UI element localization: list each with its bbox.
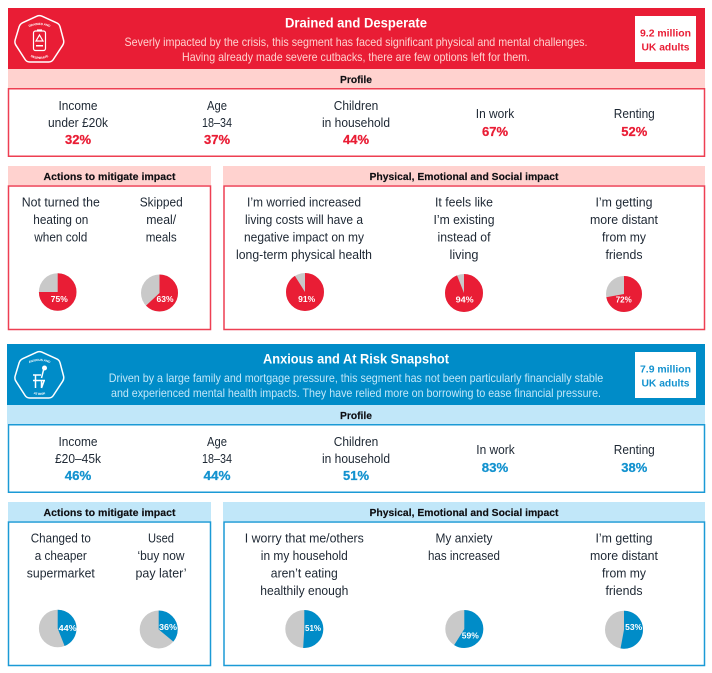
text block: segment description: Having already made severe cutbacks, there are few options left for them. <box>182 50 530 64</box>
item: existing instead of living <box>434 195 494 312</box>
stat: in work: 83% <box>482 460 509 475</box>
callout: 9.2 million UK adults: 9.2 million <box>640 28 691 40</box>
callout: 7.9 million UK adults <box>635 352 696 398</box>
stat: income: under £20k <box>48 115 108 130</box>
text block: segment description <box>109 371 604 400</box>
stat: children in household: in household <box>322 115 390 130</box>
icon: anxious and at risk badge with figure on chair: ANXIOUS AND <box>29 358 50 364</box>
stat: renting: 52% <box>621 124 648 139</box>
item: anxiety has increased: My anxiety <box>436 531 493 546</box>
stat: age: Age <box>207 434 227 449</box>
stat: in work: 67% <box>482 124 508 139</box>
stat: income: Income <box>58 98 98 113</box>
stat: age: 44% <box>204 468 231 483</box>
item: worry about eating healthily: 51% <box>305 624 321 633</box>
item: used buy now pay later: Used <box>148 531 174 546</box>
item: existing instead of living: I’m existing <box>434 212 494 227</box>
item: not turned the heating on: heating on <box>33 212 88 227</box>
item: more distant from friends <box>590 531 658 649</box>
item: existing instead of living: instead of <box>438 230 491 245</box>
text block: segment description: Severly impacted by the crisis, this segment has faced significant physical and mental challenges. <box>124 35 588 49</box>
text block: segment description <box>124 35 588 64</box>
item: more distant from friends: I’m getting <box>596 195 652 210</box>
item: changed to a cheaper supermarket: a cheaper <box>35 548 87 563</box>
stat: income: 46% <box>65 468 92 483</box>
icon: anxious and at risk badge with figure on chair: AT RISK <box>34 392 46 395</box>
icon: drained and desperate badge with battery <box>14 14 64 63</box>
item: used buy now pay later: 36% <box>159 623 177 632</box>
item: anxiety has increased: has increased <box>428 548 500 563</box>
heading: Profile: Profile <box>340 74 372 86</box>
item: changed to a cheaper supermarket: Changed to <box>31 531 91 546</box>
item: worried about long-term physical health: negative impact on my <box>244 230 364 245</box>
item: anxiety has increased <box>428 531 500 648</box>
heading: Profile: Profile <box>340 410 372 422</box>
stat: in work <box>476 106 515 139</box>
item: more distant from friends: more distant <box>590 548 658 563</box>
item: skipped meals: Skipped <box>140 195 183 210</box>
stat: renting: Renting <box>614 442 655 457</box>
stat: income <box>48 98 108 147</box>
icon: drained and desperate badge with battery: DESPERATE <box>30 54 48 59</box>
item: more distant from friends <box>590 195 658 312</box>
item: existing instead of living: It feels like <box>435 195 493 210</box>
item: worried about long-term physical health: 91% <box>298 295 315 304</box>
stat: children in household: 51% <box>343 468 369 483</box>
stat: children in household: Children <box>334 434 378 449</box>
panel: Anxious and At Risk segment <box>7 344 706 666</box>
text block: segment description: and experienced mental health impacts. They have relied more on borrowing to ease financial pressure. <box>111 386 601 400</box>
panel: Physical, Emotional and Social impact <box>223 502 705 666</box>
item: more distant from friends: 72% <box>616 296 632 305</box>
item: worried about long-term physical health: long-term physical health <box>236 247 372 262</box>
stat: age: 37% <box>204 132 230 147</box>
header banner: Anxious and At Risk Snapshot <box>7 344 705 405</box>
icon: drained and desperate badge with battery: DRAINED AND <box>28 22 50 27</box>
panel: Drained and Desperate segment <box>8 8 706 330</box>
callout: 9.2 million UK adults: UK adults <box>642 42 690 54</box>
stat: age <box>202 98 232 147</box>
item: more distant from friends: friends <box>606 583 643 598</box>
item: skipped meals <box>140 195 183 312</box>
item: worried about long-term physical health: living costs will have a <box>245 212 364 227</box>
stat: renting: Renting <box>614 106 655 121</box>
item: worry about eating healthily: aren’t eating <box>271 566 338 581</box>
stat: age: 18–34 <box>202 115 232 130</box>
callout: 9.2 million UK adults <box>635 16 696 62</box>
stat: renting <box>614 442 655 475</box>
stat: income: 32% <box>65 132 91 147</box>
item: skipped meals: 63% <box>156 295 174 304</box>
item: more distant from friends: friends <box>606 247 643 262</box>
stat: children in household: Children <box>334 98 378 113</box>
item: used buy now pay later: ‘buy now <box>138 548 185 563</box>
item: more distant from friends: from my <box>602 566 646 581</box>
panel: Profile <box>8 69 705 156</box>
heading: Physical, Emotional and Social impact: Physical, Emotional and Social impact <box>370 171 559 183</box>
heading: Actions to mitigate impact: Actions to mitigate impact <box>44 507 176 519</box>
stat: children in household <box>322 98 390 147</box>
header banner: Drained and Desperate <box>8 8 705 69</box>
item: changed to a cheaper supermarket <box>27 531 95 647</box>
stat: income <box>55 434 101 483</box>
item: used buy now pay later <box>136 531 187 648</box>
item: more distant from friends: from my <box>602 230 646 245</box>
panel: Actions to mitigate impact <box>8 502 211 666</box>
heading: Drained and Desperate: Drained and Desperate <box>285 14 427 30</box>
item: worry about eating healthily <box>245 531 364 648</box>
item: anxiety has increased: 59% <box>462 632 479 641</box>
item: more distant from friends: more distant <box>590 212 658 227</box>
stat: in work: In work <box>476 106 515 121</box>
callout: 7.9 million UK adults: UK adults <box>642 378 690 390</box>
item: not turned the heating on <box>22 195 100 311</box>
stat: children in household: 44% <box>343 132 369 147</box>
stat: children in household: in household <box>322 451 390 466</box>
item: worried about long-term physical health <box>236 195 372 311</box>
item: more distant from friends: 53% <box>625 623 642 632</box>
stat: renting: 38% <box>621 460 648 475</box>
item: not turned the heating on: when cold <box>33 230 87 245</box>
item: existing instead of living: 94% <box>456 296 474 304</box>
stat: income: Income <box>58 434 98 449</box>
panel: Profile <box>7 405 705 492</box>
panel: Physical, Emotional and Social impact <box>223 166 705 330</box>
item: worried about long-term physical health: I’m worried increased <box>247 195 361 210</box>
item: worry about eating healthily: healthily enough <box>260 583 348 598</box>
callout: 7.9 million UK adults: 7.9 million <box>640 364 691 376</box>
heading: Actions to mitigate impact: Actions to mitigate impact <box>44 171 176 183</box>
item: used buy now pay later: pay later’ <box>136 566 187 581</box>
item: not turned the heating on: 75% <box>51 295 68 304</box>
stat: income: £20–45k <box>55 451 101 466</box>
item: not turned the heating on: Not turned the <box>22 195 100 210</box>
item: worry about eating healthily: in my household <box>261 548 348 563</box>
stat: in work <box>476 442 515 475</box>
item: more distant from friends: I’m getting <box>596 531 652 546</box>
stat: children in household <box>322 434 390 483</box>
panel: Actions to mitigate impact <box>8 166 211 330</box>
heading: Physical, Emotional and Social impact: Physical, Emotional and Social impact <box>370 507 559 519</box>
stat: age: 18–34 <box>202 451 232 466</box>
stat: age <box>202 434 232 483</box>
stat: age: Age <box>207 98 227 113</box>
item: existing instead of living: living <box>450 247 478 262</box>
item: worry about eating healthily: I worry that me/others <box>245 531 364 546</box>
heading: Anxious and At Risk Snapshot: Anxious and At Risk Snapshot <box>263 350 449 366</box>
stat: in work: In work <box>476 442 515 457</box>
item: skipped meals: meals <box>146 230 177 245</box>
stat: renting <box>614 106 655 139</box>
item: skipped meals: meal/ <box>146 212 177 227</box>
text block: segment description: Driven by a large family and mortgage pressure, this segment has not been particularly financially stable <box>109 371 604 385</box>
item: changed to a cheaper supermarket: 44% <box>59 624 77 633</box>
item: changed to a cheaper supermarket: supermarket <box>27 566 95 581</box>
icon: anxious and at risk badge with figure on chair <box>14 350 64 399</box>
